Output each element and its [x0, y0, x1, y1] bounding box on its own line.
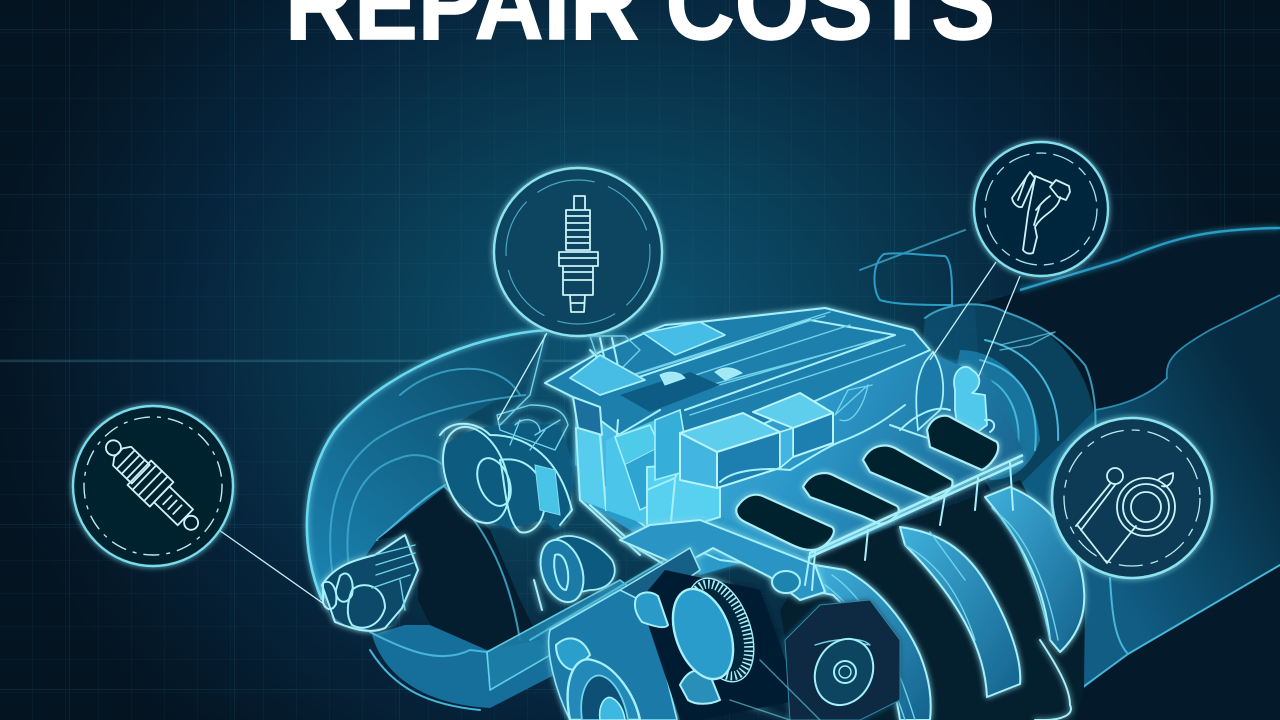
- left engine connector: [322, 535, 418, 631]
- hood and roof lines: [860, 228, 1280, 505]
- left coil housings: [573, 397, 720, 555]
- crank pulley: [568, 659, 640, 720]
- coil cube 1: [680, 413, 780, 488]
- lower belt: [549, 590, 677, 720]
- leader lines: [219, 262, 1020, 604]
- intake manifold runners: [620, 416, 1085, 720]
- alternator assembly: [431, 335, 575, 533]
- throttle neck at sensor: [890, 352, 994, 445]
- lower block plate: [620, 520, 825, 600]
- runner 3: [900, 527, 1071, 720]
- right car body panel: [1000, 295, 1280, 688]
- icon: tensioner pulley: [1076, 468, 1175, 563]
- runner 4: [985, 487, 1084, 652]
- car body wireframe: [307, 228, 1280, 720]
- main engine block: [545, 308, 1025, 600]
- callout: pulley diagram (right): [1052, 418, 1212, 578]
- idler pulley: [533, 534, 615, 610]
- cam box: [785, 600, 900, 720]
- timing belt and pulleys: [533, 534, 900, 720]
- dark wheel arch: [377, 487, 540, 650]
- icon: vertical spark plug: [559, 196, 598, 312]
- dark cabin behind hood: [975, 228, 1280, 720]
- valve cover: [545, 308, 930, 452]
- manifold ports: [736, 416, 998, 550]
- callout: spark plug (top): [494, 168, 662, 336]
- runner 2: [810, 565, 931, 720]
- icon: diagonal spark plug: [96, 430, 208, 540]
- gear pulley: [662, 569, 767, 691]
- callout: sensor (top right): [974, 142, 1108, 276]
- icon: crank sensor: [1012, 172, 1070, 254]
- callout: spark plug (left): [73, 406, 233, 566]
- front fender: [307, 330, 548, 600]
- fuel rail: [808, 455, 1023, 558]
- coil cube 2: [753, 393, 833, 468]
